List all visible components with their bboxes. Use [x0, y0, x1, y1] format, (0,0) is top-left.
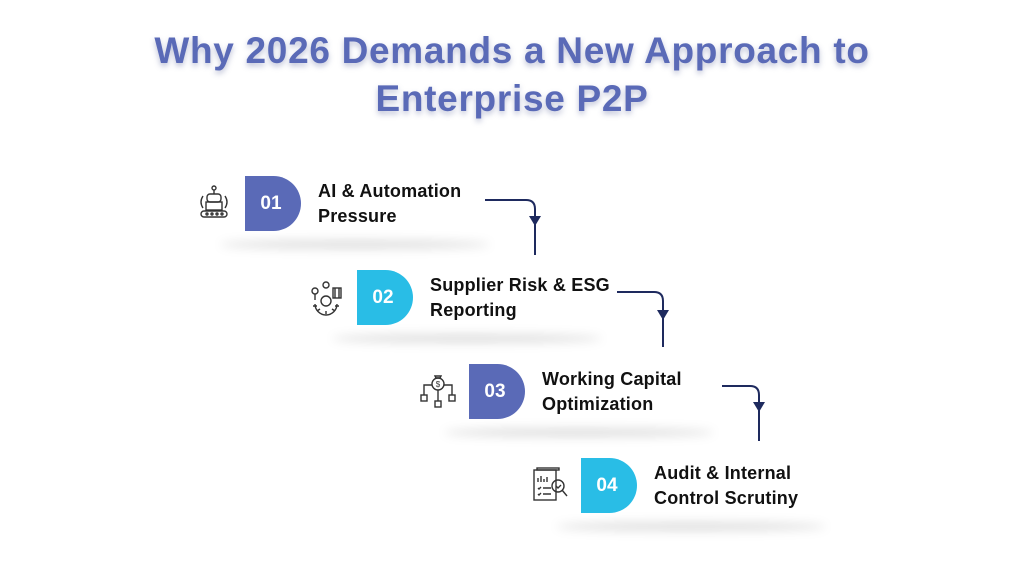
- icon: robot: [200, 185, 228, 218]
- label 03: Optimization: [542, 394, 653, 414]
- badge 02: 02: [372, 287, 394, 308]
- label 04: Audit & Internal: [654, 463, 791, 483]
- label 04: [654, 463, 798, 508]
- title: Why 2026 Demands a New Approach to: [154, 30, 870, 71]
- badge 03: 03: [484, 381, 506, 402]
- label 02: Supplier Risk & ESG: [430, 275, 610, 295]
- title: Enterprise P2P: [375, 78, 649, 119]
- step 01: [200, 176, 480, 252]
- label 01: Pressure: [318, 206, 397, 226]
- icon: money flow: [420, 375, 456, 408]
- badge 04: 04: [596, 475, 618, 496]
- step 02: [311, 270, 610, 346]
- label 02: [430, 275, 610, 320]
- label 01: AI & Automation: [318, 181, 461, 201]
- icon: ESG gear: [311, 281, 342, 316]
- badge 01: [245, 176, 301, 231]
- label 01: [318, 181, 461, 226]
- badge 01: 01: [260, 193, 282, 214]
- step 04: [533, 458, 816, 534]
- arrow 2: [617, 291, 669, 347]
- step 03: [420, 364, 704, 440]
- label 04: Control Scrutiny: [654, 488, 798, 508]
- arrow 3: [722, 385, 765, 441]
- icon: audit report: [533, 467, 568, 501]
- label 03: [542, 369, 682, 414]
- badge 04: [581, 458, 637, 513]
- label 02: Reporting: [430, 300, 517, 320]
- badge 02: [357, 270, 413, 325]
- icon: money flow: $: [436, 380, 441, 389]
- badge 03: [469, 364, 525, 419]
- label 03: Working Capital: [542, 369, 682, 389]
- arrow 1: [485, 199, 541, 255]
- title: [152, 30, 870, 124]
